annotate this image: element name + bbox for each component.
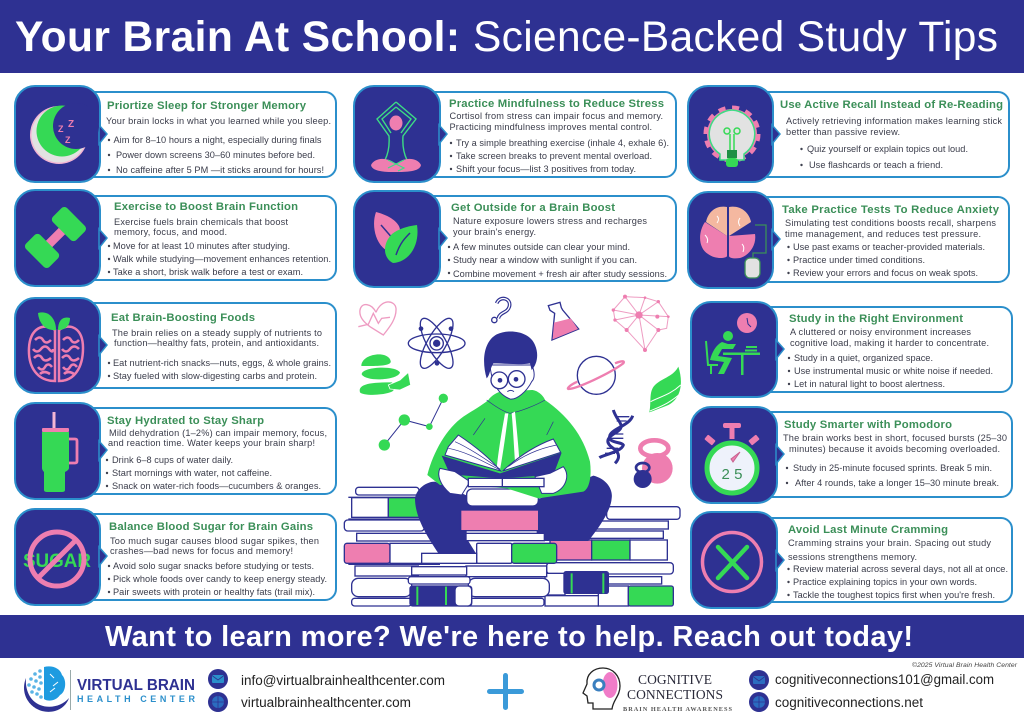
heading: Use Active Recall Instead of Re-Reading bbox=[780, 99, 1003, 111]
text block: and reaction time. Water keeps your brain sharp! bbox=[108, 438, 315, 448]
panel: brain foods bbox=[15, 298, 336, 393]
logo: Cognitive Connections bbox=[583, 668, 732, 713]
text block: crashes—bad news for focus and memory! bbox=[110, 546, 293, 556]
panel: outside bbox=[354, 191, 676, 287]
text block bbox=[108, 217, 331, 277]
text block: Power down screens 30–60 minutes before bed. bbox=[116, 150, 315, 160]
icon: dumbbell bbox=[23, 205, 88, 270]
header banner: Science-Backed Study Tips bbox=[473, 14, 998, 61]
icon: moon: Z bbox=[68, 119, 74, 130]
logo: Cognitive Connections: COGNITIVE bbox=[638, 672, 712, 687]
icon: leaves bbox=[374, 212, 418, 263]
icon: tumbler bbox=[42, 412, 77, 492]
icon: brain apple bbox=[29, 312, 83, 381]
contact: Cognitive Connections: cognitiveconnections101@gmail.com bbox=[775, 672, 994, 687]
text block: After 4 rounds, take a longer 15–30 minute break. bbox=[795, 478, 999, 488]
text block bbox=[785, 218, 996, 278]
text block: A cluttered or noisy environment increases bbox=[790, 327, 971, 337]
icon: crossed circle bbox=[702, 532, 762, 592]
contact: Cognitive Connections bbox=[749, 670, 994, 712]
text block bbox=[787, 538, 1008, 600]
icon: gear bulb bbox=[706, 108, 758, 167]
text block: Cramming strains your brain. Spacing out study bbox=[788, 538, 991, 548]
text block: Study in a quiet, organized space. bbox=[794, 353, 933, 363]
text block: memory, focus, and mood. bbox=[114, 227, 227, 237]
text block bbox=[108, 536, 327, 597]
text block: The brain works best in short, focused bursts (25–30 bbox=[783, 433, 1007, 443]
text block: Take a short, brisk walk before a test or exam. bbox=[113, 267, 303, 277]
text block bbox=[108, 328, 331, 381]
logo: Virtual Brain Health Center bbox=[24, 666, 195, 712]
text block: Stay fueled with slow-digesting carbs and protein. bbox=[113, 371, 317, 381]
icon: student at desk bbox=[706, 313, 760, 375]
text block: sessions strengthens memory. bbox=[788, 552, 917, 562]
text block: No caffeine after 5 PM —it sticks around for hours! bbox=[116, 165, 324, 175]
text block: Try a simple breathing exercise (inhale 4, exhale 6). bbox=[456, 138, 669, 148]
icon: no sugar bbox=[23, 532, 91, 586]
text block: Use past exams or teacher-provided materials. bbox=[793, 242, 985, 252]
text block: Simulating test conditions boosts recall, sharpens bbox=[785, 218, 996, 228]
text block: Avoid solo sugar snacks before studying or tests. bbox=[113, 561, 314, 571]
call to action banner: Want to learn more? We're here to help. Reach out today! bbox=[105, 621, 913, 653]
text block: Study in 25-minute focused sprints. Break 5 min. bbox=[793, 463, 992, 473]
illustration: student reading on books bbox=[344, 295, 683, 606]
panel: pomodoro bbox=[691, 407, 1012, 503]
text block: Walk while studying—movement enhances retention. bbox=[113, 254, 331, 264]
text block: Let in natural light to boost alertness. bbox=[794, 379, 945, 389]
text block: your brain's energy. bbox=[453, 227, 536, 237]
text block: minutes) because it avoids becoming overloaded. bbox=[789, 444, 1000, 454]
text block: Cortisol from stress can impair focus and memory. bbox=[450, 111, 663, 121]
text block bbox=[450, 111, 669, 174]
panel: mindfulness bbox=[354, 86, 676, 182]
logo: Virtual Brain Health Center: VIRTUAL BRAIN bbox=[77, 677, 195, 694]
panel: hydrate bbox=[15, 403, 336, 499]
contact: Virtual Brain Health Center bbox=[208, 669, 445, 712]
copyright: ©2025 Virtual Brain Health Center bbox=[912, 661, 1018, 669]
icon: moon: Z bbox=[65, 135, 71, 145]
heading: Study Smarter with Pomodoro bbox=[784, 419, 952, 431]
text block: Mild dehydration (1–2%) can impair memory, focus, bbox=[109, 428, 327, 438]
text block bbox=[106, 116, 331, 175]
text block: Shift your focus—list 3 positives from today. bbox=[456, 164, 636, 174]
heading: Take Practice Tests To Reduce Anxiety bbox=[782, 204, 1000, 216]
text block: cognitive load, making it harder to concentrate. bbox=[790, 338, 989, 348]
icon: meditation bbox=[371, 102, 421, 172]
text block: Aim for 8–10 hours a night, especially during finals bbox=[114, 135, 322, 145]
icon: brain and mouse bbox=[700, 207, 766, 278]
panel: sleep bbox=[15, 86, 336, 182]
text block: The brain relies on a steady supply of nutrients to bbox=[112, 328, 322, 338]
text block: Review your errors and focus on weak spots. bbox=[793, 268, 978, 278]
logo: Cognitive Connections: BRAIN HEALTH AWARENESS bbox=[623, 706, 732, 713]
text block bbox=[788, 327, 993, 389]
heading: Stay Hydrated to Stay Sharp bbox=[107, 415, 264, 427]
panel: environment bbox=[691, 302, 1012, 397]
heading: Exercise to Boost Brain Function bbox=[114, 201, 298, 213]
text block: Nature exposure lowers stress and recharges bbox=[453, 216, 647, 226]
icon: stopwatch: 25 bbox=[722, 466, 742, 483]
text block: Start mornings with water, not caffeine. bbox=[112, 468, 272, 478]
logo: Cognitive Connections: CONNECTIONS bbox=[627, 687, 723, 702]
student head bbox=[484, 331, 537, 399]
text block bbox=[786, 116, 1002, 170]
text block: Eat nutrient-rich snacks—nuts, eggs, & whole grains. bbox=[113, 358, 331, 368]
text block: Pair sweets with protein or healthy fats (trail mix). bbox=[113, 587, 315, 597]
heading: Balance Blood Sugar for Brain Gains bbox=[109, 521, 313, 533]
text block: Exercise fuels brain chemicals that boost bbox=[114, 217, 288, 227]
text block: Practice under timed conditions. bbox=[793, 255, 925, 265]
call to action banner bbox=[0, 615, 1024, 658]
contact: Virtual Brain Health Center: virtualbrainhealthcenter.com bbox=[241, 695, 411, 710]
heading: Priortize Sleep for Stronger Memory bbox=[107, 100, 307, 112]
text block: Snack on water-rich foods—cucumbers & oranges. bbox=[112, 481, 321, 491]
center book stack bbox=[408, 489, 557, 606]
logo: Virtual Brain Health Center: HEALTH CENTER bbox=[77, 694, 196, 704]
text block: time management, and reduces test pressure. bbox=[785, 229, 981, 239]
text block: Quiz yourself or explain topics out loud. bbox=[807, 144, 968, 154]
plus sign bbox=[487, 673, 524, 710]
panel: active recall bbox=[688, 86, 1009, 182]
heading: Eat Brain-Boosting Foods bbox=[111, 312, 255, 324]
text block: Practice explaining topics in your own words. bbox=[793, 577, 977, 587]
icon: moon: Z bbox=[58, 124, 64, 134]
panel: blood sugar bbox=[15, 509, 336, 605]
text block: Drink 6–8 cups of water daily. bbox=[112, 455, 233, 465]
heading: Get Outside for a Brain Boost bbox=[451, 202, 615, 214]
panel: practice tests bbox=[688, 192, 1009, 288]
contact: Cognitive Connections: cognitiveconnections.net bbox=[775, 695, 923, 710]
text block: Use flashcards or teach a friend. bbox=[809, 160, 943, 170]
icon: moon bbox=[30, 103, 99, 164]
heading: Avoid Last Minute Cramming bbox=[788, 524, 948, 536]
text block bbox=[448, 216, 667, 279]
panel: exercise bbox=[15, 190, 336, 286]
text block bbox=[783, 433, 1007, 488]
text block: Move for at least 10 minutes after studying. bbox=[113, 241, 290, 251]
header banner: Your Brain At School: bbox=[15, 14, 460, 61]
panel: cramming bbox=[691, 512, 1012, 608]
student legs bbox=[415, 476, 612, 556]
icon: stopwatch bbox=[704, 423, 760, 493]
header banner bbox=[0, 0, 1024, 73]
book stacks bbox=[344, 487, 680, 606]
student torso bbox=[427, 390, 591, 498]
text block: Your brain locks in what you learned while you sleep. bbox=[106, 116, 331, 126]
text block: Practicing mindfulness improves mental control. bbox=[450, 122, 652, 132]
text block: Use instrumental music or white noise if needed. bbox=[794, 366, 993, 376]
text block bbox=[106, 428, 327, 491]
icon: no sugar: SUGAR bbox=[23, 550, 91, 572]
heading: Practice Mindfulness to Reduce Stress bbox=[449, 98, 664, 110]
text block: function—healthy fats, protein, and antioxidants. bbox=[114, 338, 319, 348]
text block: Combine movement + fresh air after study sessions. bbox=[453, 269, 667, 279]
decorative science icons bbox=[358, 295, 683, 488]
text block: better than passive review. bbox=[786, 127, 900, 137]
text block: Tackle the toughest topics first when you're fresh. bbox=[793, 590, 995, 600]
text block: Actively retrieving information makes learning stick bbox=[786, 116, 1002, 126]
text block: Review material across several days, not all at once. bbox=[793, 564, 1008, 574]
text block: Pick whole foods over candy to keep energy steady. bbox=[113, 574, 327, 584]
hands and top book bbox=[439, 467, 567, 495]
text block: A few minutes outside can clear your mind. bbox=[453, 242, 630, 252]
open book bbox=[442, 435, 562, 478]
heading: Study in the Right Environment bbox=[789, 313, 963, 325]
text block: Study near a window with sunlight if you can. bbox=[453, 255, 637, 265]
contact: Virtual Brain Health Center: info@virtualbrainhealthcenter.com bbox=[241, 673, 445, 688]
text block: Too much sugar causes blood sugar spikes, then bbox=[110, 536, 319, 546]
text block: Take screen breaks to prevent mental overload. bbox=[456, 151, 652, 161]
